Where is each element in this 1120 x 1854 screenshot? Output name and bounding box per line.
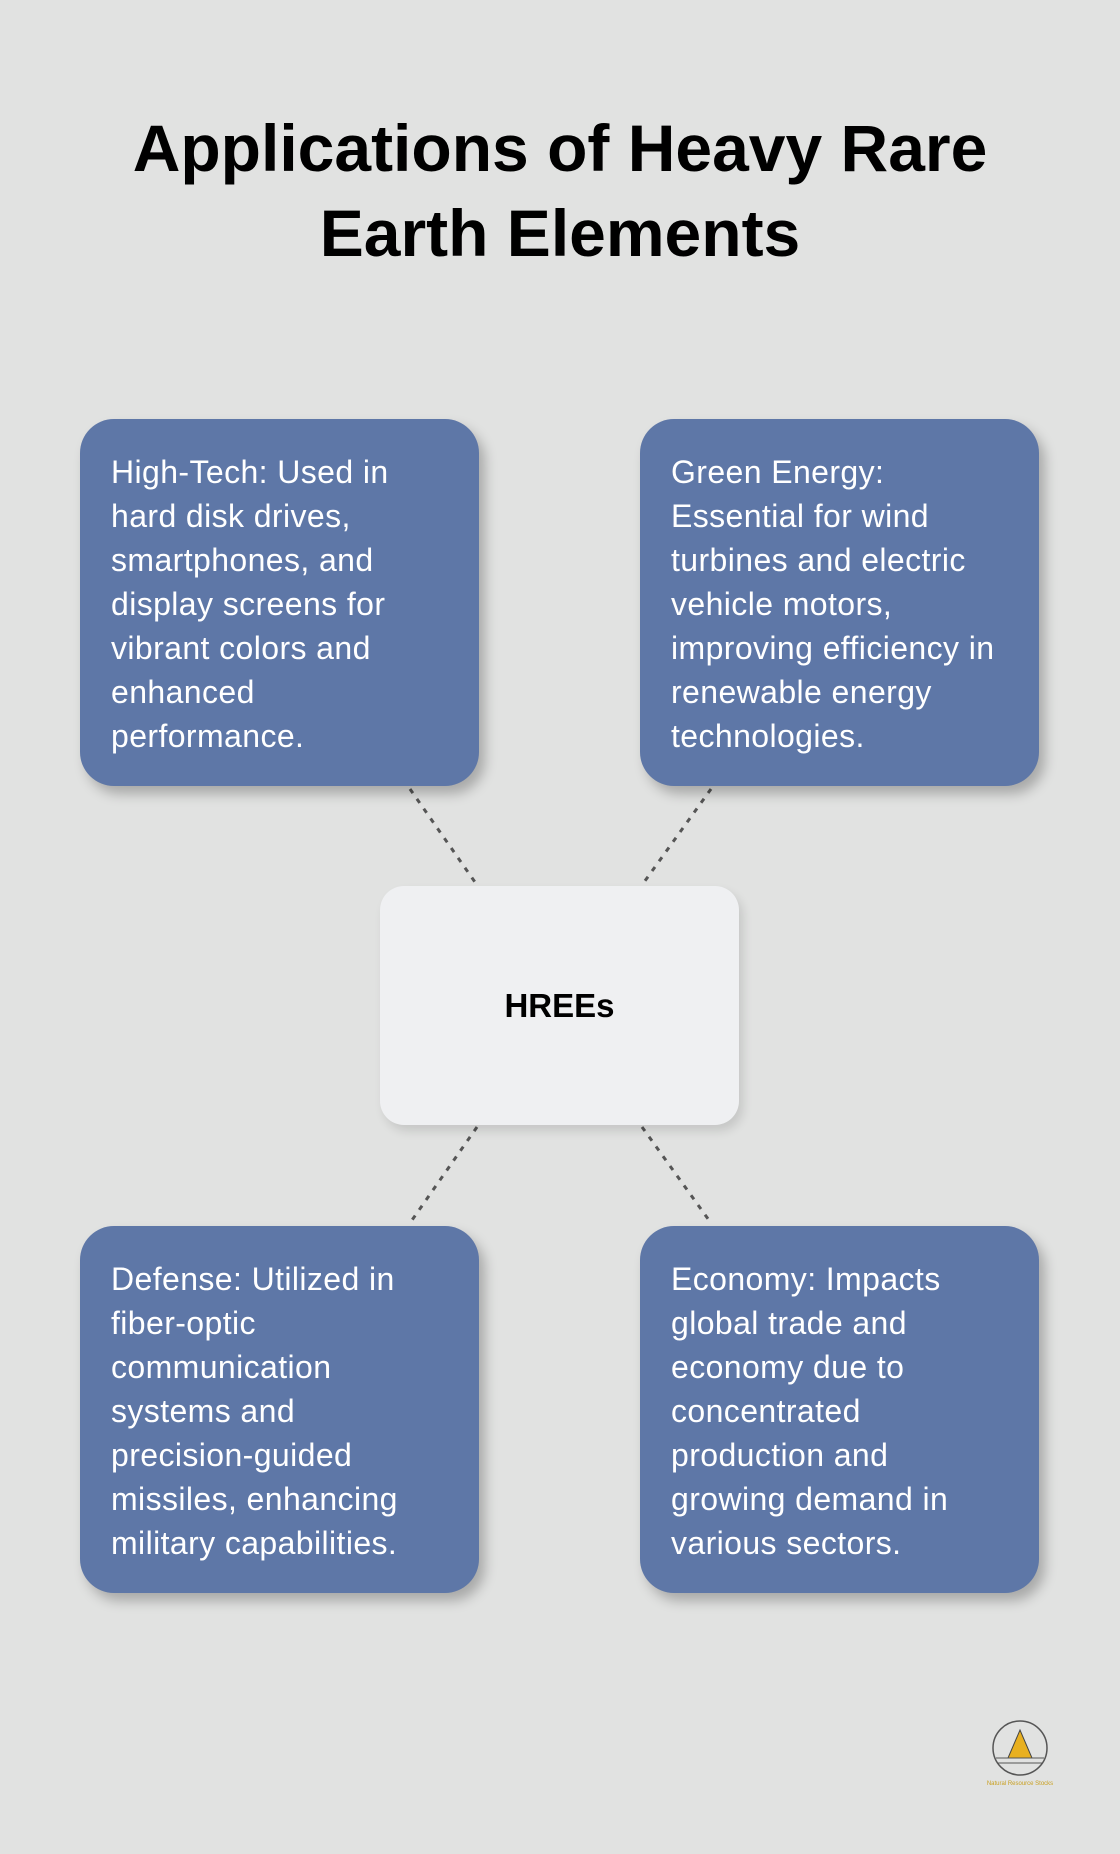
card: economy: growing demand in: [671, 1481, 948, 1517]
card: defense: military capabilities.: [111, 1525, 397, 1561]
card: defense: precision-guided: [111, 1437, 352, 1473]
logo: Natural Resource Stocks: [987, 1781, 1053, 1787]
card: defense: fiber-optic: [111, 1305, 256, 1341]
card: green energy: turbines and electric: [671, 542, 966, 578]
card: green energy: technologies.: [671, 718, 865, 754]
title: Applications of Heavy Rare: [133, 111, 987, 185]
card: green energy: renewable energy: [671, 674, 932, 710]
logo: [987, 1720, 1053, 1787]
title: Earth Elements: [320, 196, 800, 270]
card: defense: systems and: [111, 1393, 295, 1429]
card: high-tech: High-Tech: Used in: [111, 454, 389, 490]
card: economy: global trade and: [671, 1305, 907, 1341]
card: high-tech: enhanced: [111, 674, 255, 710]
card: high-tech: display screens for: [111, 586, 385, 622]
card: high-tech: vibrant colors and: [111, 630, 371, 666]
card: green energy: improving efficiency in: [671, 630, 994, 666]
card: economy: Economy: Impacts: [671, 1261, 941, 1297]
card: defense: communication: [111, 1349, 331, 1385]
card: green energy: Essential for wind: [671, 498, 929, 534]
card: economy: various sectors.: [671, 1525, 901, 1561]
card: defense: [80, 1226, 479, 1593]
card: green energy: [640, 419, 1039, 786]
card: green energy: Green Energy:: [671, 454, 884, 490]
card: economy: economy due to: [671, 1349, 904, 1385]
card: economy: concentrated: [671, 1393, 861, 1429]
card: high-tech: [80, 419, 479, 786]
card: high-tech: smartphones, and: [111, 542, 374, 578]
card: green energy: vehicle motors,: [671, 586, 892, 622]
card: high-tech: hard disk drives,: [111, 498, 351, 534]
card: high-tech: performance.: [111, 718, 304, 754]
card: economy: [640, 1226, 1039, 1593]
center: HREEs: HREEs: [504, 986, 615, 1024]
center: HREEs: [380, 886, 739, 1125]
card: defense: missiles, enhancing: [111, 1481, 398, 1517]
card: economy: production and: [671, 1437, 888, 1473]
title: [133, 111, 987, 270]
card: defense: Defense: Utilized in: [111, 1261, 395, 1297]
